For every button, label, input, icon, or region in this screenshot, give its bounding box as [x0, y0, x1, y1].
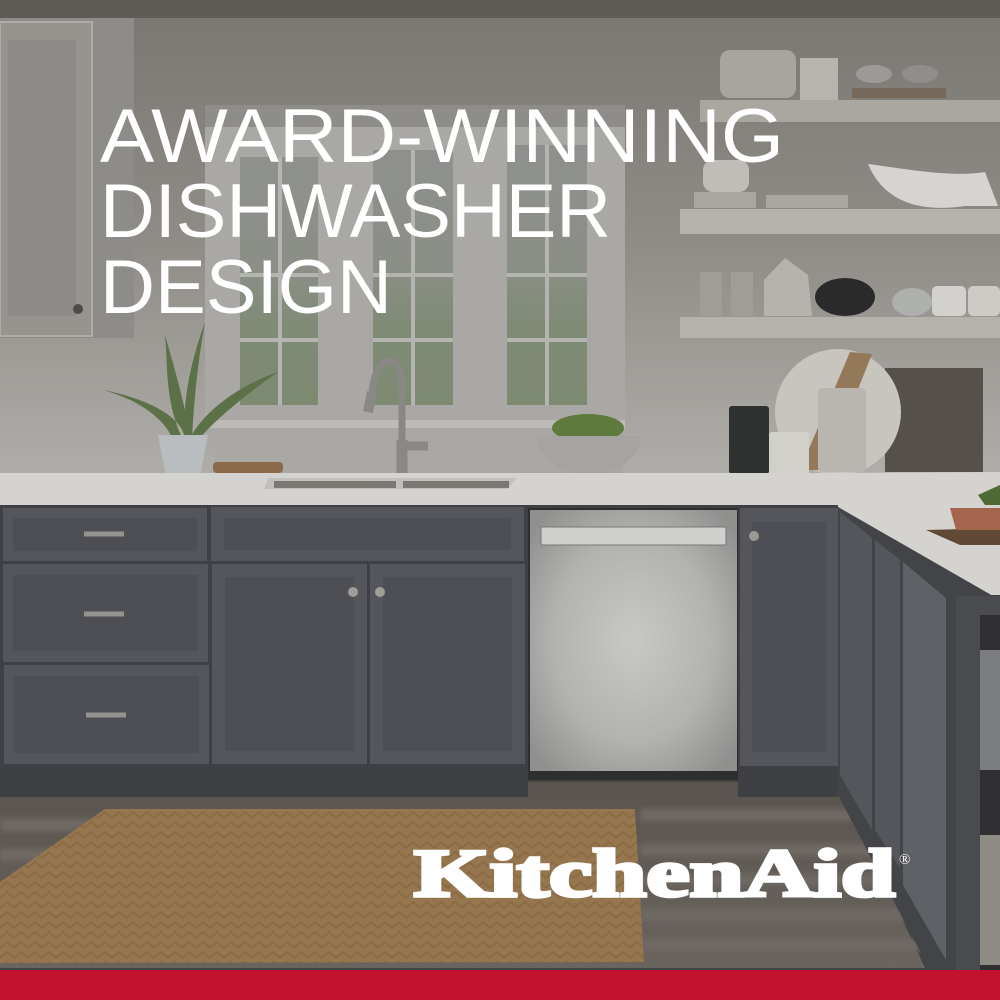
shelf items: tableware: [694, 50, 1000, 316]
ceiling band: [0, 0, 1000, 18]
open shelves: [680, 100, 1000, 338]
plant: [103, 322, 278, 476]
logo: KitchenAid: [414, 835, 910, 911]
title: [100, 94, 784, 330]
logo: KitchenAid: ®: [899, 852, 910, 868]
faucet: [368, 361, 428, 474]
toe kick: [0, 767, 528, 797]
title: DISHWASHER: [100, 169, 611, 254]
dishwasher: [528, 508, 738, 780]
sink: [264, 478, 516, 489]
background: kitchen wall: [0, 0, 1000, 480]
window: [205, 105, 625, 473]
bowl with greens: [536, 414, 642, 476]
side cabinets: [838, 507, 1000, 970]
title: AWARD-WINNING: [100, 94, 784, 179]
countertop tray and carrots: [213, 462, 1000, 545]
floor: [0, 782, 925, 968]
title: DESIGN: [100, 245, 392, 330]
red footer bar: [0, 970, 1000, 1000]
countertop decor: boards and canisters: [729, 349, 983, 478]
countertop: [0, 472, 1000, 595]
base cabinets: [0, 505, 838, 767]
rug: [0, 809, 644, 963]
logo: KitchenAid: KitchenAid: [414, 835, 895, 911]
upper cabinet: [0, 18, 134, 338]
